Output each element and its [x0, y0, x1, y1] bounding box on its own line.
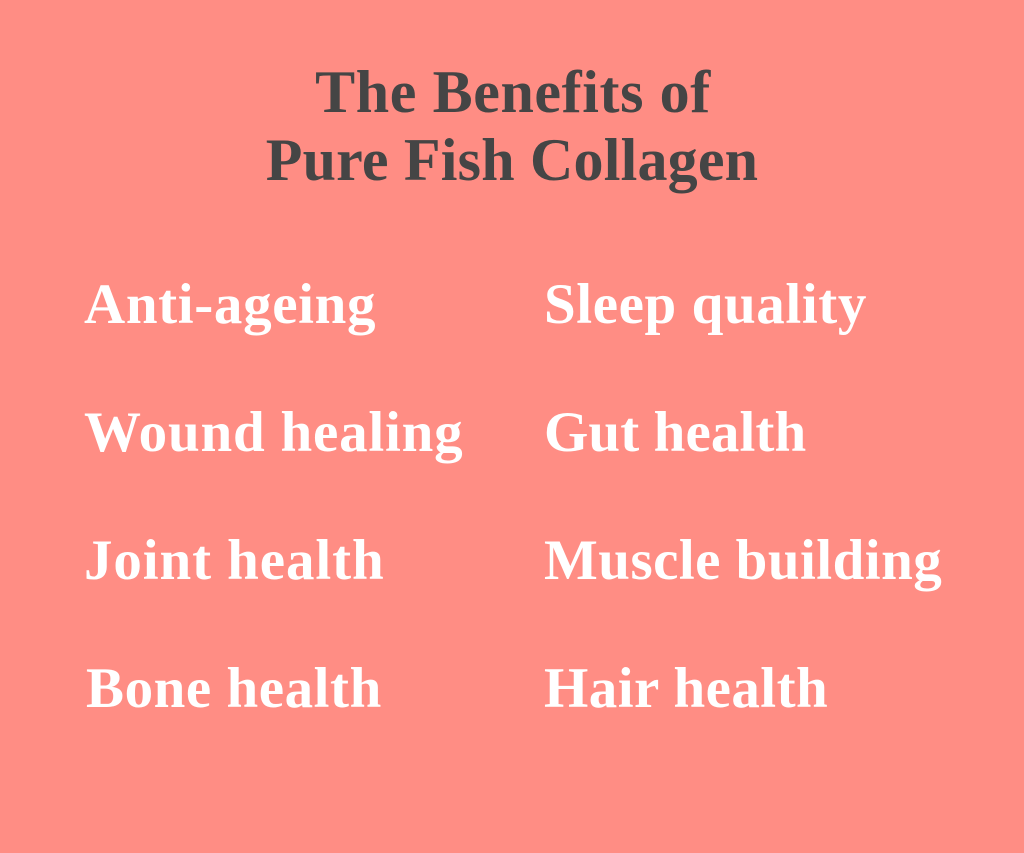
benefit: Joint health: Joint health	[84, 529, 385, 592]
benefit: Hair health: Hair health	[544, 657, 828, 720]
benefit: Sleep quality: Sleep quality	[544, 273, 867, 336]
benefits list: left column	[84, 273, 463, 720]
title	[266, 59, 758, 194]
title: Pure Fish Collagen	[266, 127, 758, 193]
benefit: Gut health: Gut health	[544, 401, 806, 464]
benefit: Anti-ageing: Anti-ageing	[84, 273, 376, 336]
benefit: Bone health: Bone health	[86, 657, 382, 720]
title: The Benefits of	[315, 59, 711, 125]
benefit: Wound healing: Wound healing	[84, 401, 463, 464]
benefits list: right column	[544, 273, 942, 720]
benefit: Muscle building: Muscle building	[544, 529, 942, 592]
